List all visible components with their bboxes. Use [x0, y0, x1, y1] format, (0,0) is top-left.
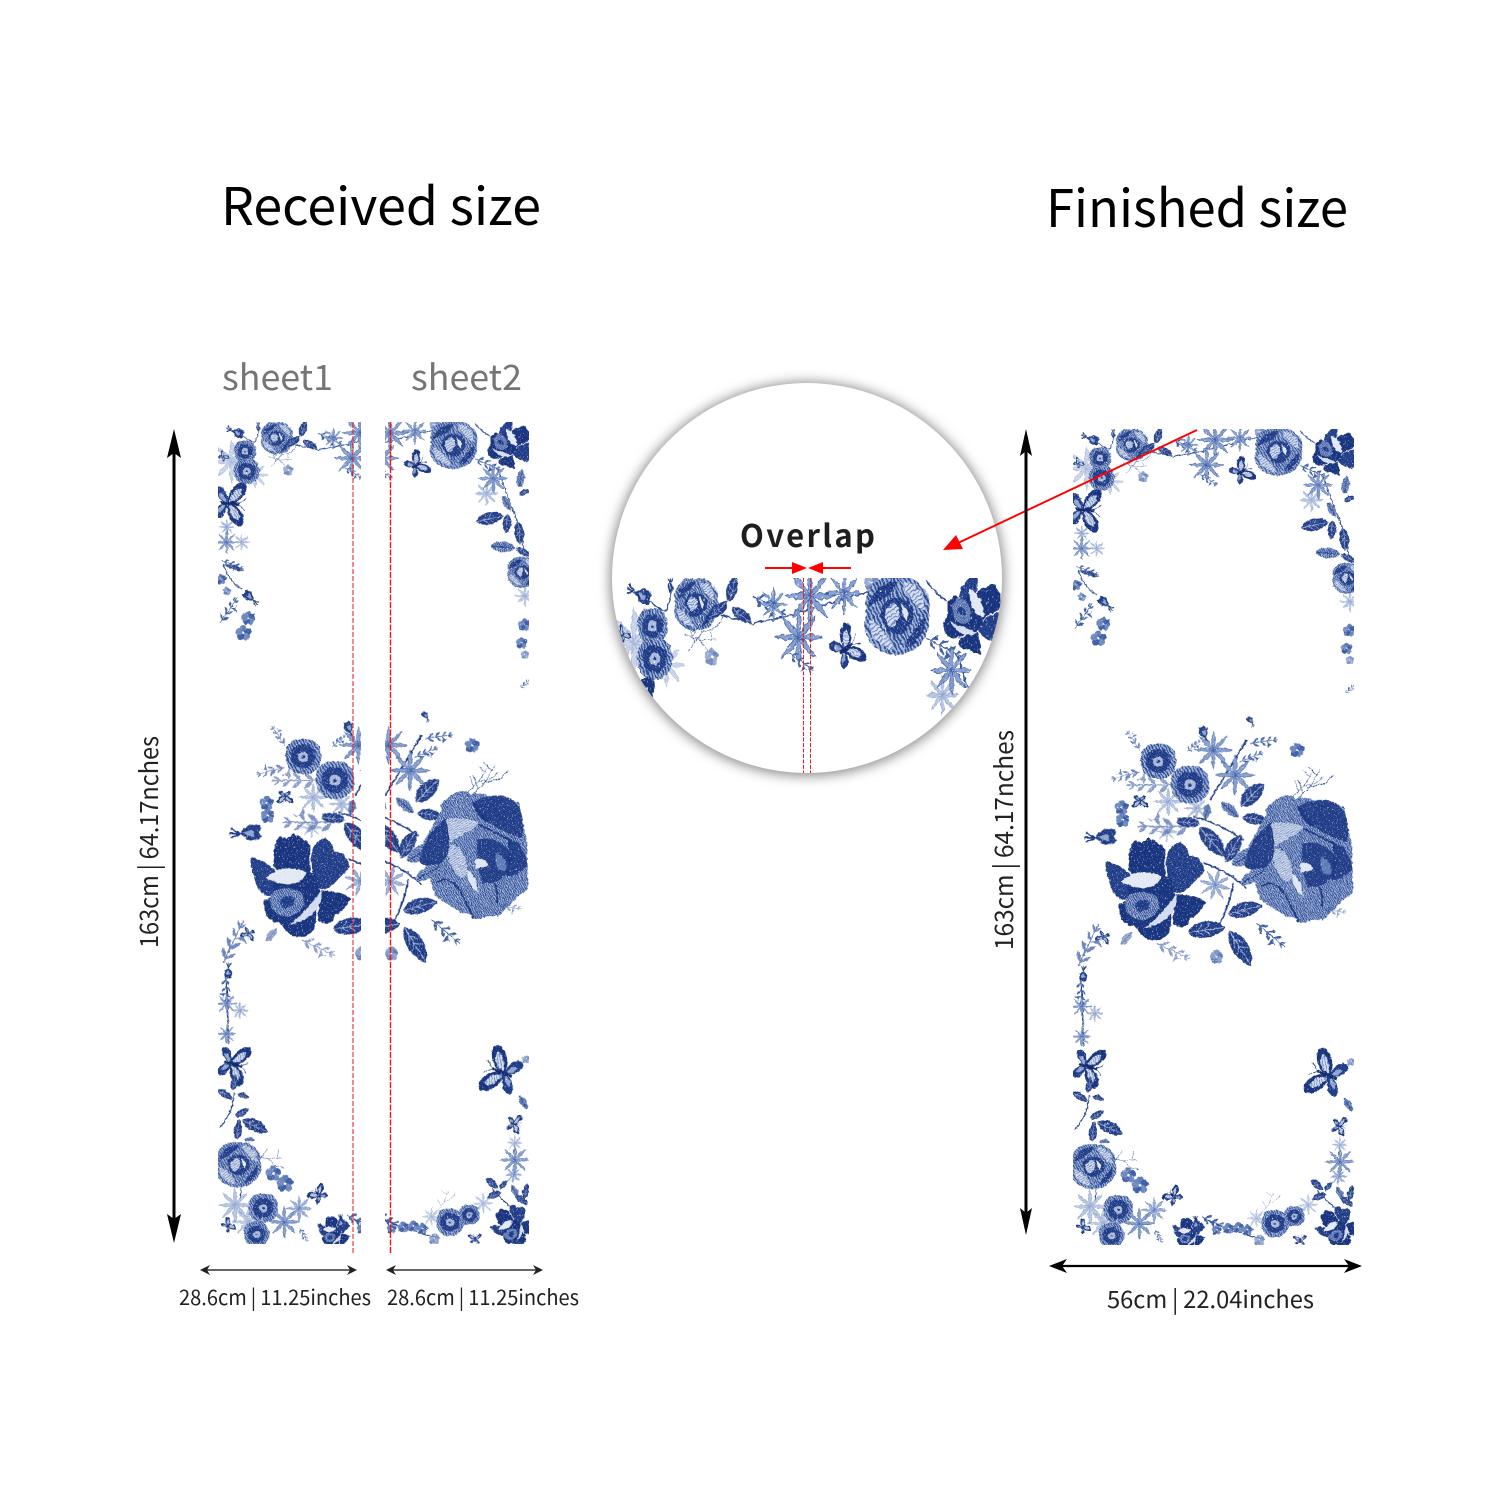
label: Overlap: Overlap: [740, 511, 875, 556]
overlap line on sheet 2: [390, 422, 392, 1254]
overlap line on sheet 1: [352, 422, 354, 1254]
arrows: overlap width: [765, 562, 851, 574]
overlap seam lines: [804, 578, 810, 773]
arrow: finished width: [1049, 1259, 1362, 1273]
arrow: finished height: [1020, 429, 1032, 1235]
arrow: sheet 2 width: [386, 1265, 543, 1275]
title: Received size: Received size: [221, 165, 541, 240]
arrow: overlap pointer: [943, 430, 1197, 550]
label: finished height: 163cm | 64.17nches: [985, 730, 1021, 950]
label: finished width: 56cm | 22.04inches: [1107, 1280, 1314, 1315]
label: sheet1: sheet1: [222, 350, 333, 401]
panel: sheet 1 floral artwork: [218, 422, 361, 1244]
label: received height: 163cm | 64.17nches: [130, 736, 166, 948]
arrow: sheet 1 width: [200, 1265, 357, 1275]
label: sheet 2 width: 28.6cm | 11.25inches: [387, 1282, 579, 1312]
label: sheet2: sheet2: [411, 350, 522, 401]
callout: magnifier circle: [602, 374, 1012, 784]
panel: finished floral artwork: [1066, 420, 1367, 1255]
arrow: received height: [167, 429, 181, 1243]
title: Finished size: Finished size: [1046, 167, 1348, 242]
panel: sheet 2 floral artwork: [385, 422, 529, 1244]
label: sheet 1 width: 28.6cm | 11.25inches: [179, 1282, 371, 1312]
